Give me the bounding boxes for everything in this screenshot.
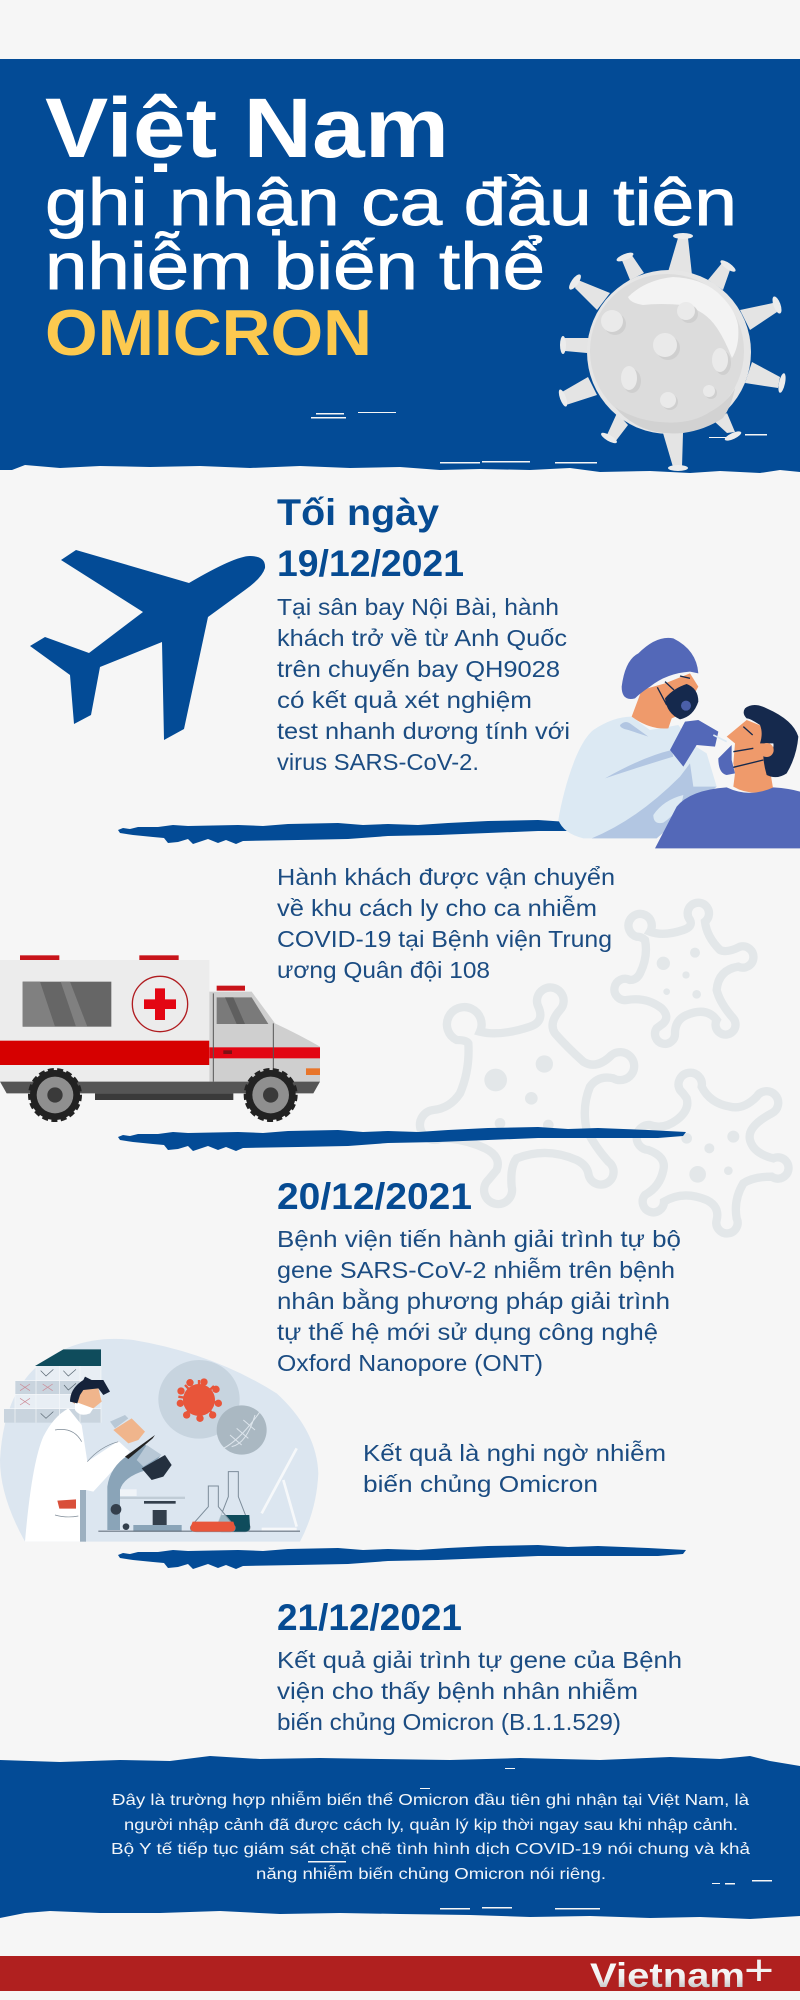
panel: conclusion — [0, 1756, 800, 1919]
text block: 19/12 heading: Tối ngày — [277, 492, 439, 533]
table line — [98, 1531, 300, 1532]
text block: transport — [277, 864, 615, 983]
text block: sequencing: Oxford Nanopore (ONT) — [277, 1350, 543, 1376]
brush stroke 2 — [118, 1127, 686, 1151]
calendar — [4, 1349, 101, 1423]
text block: airport: trên chuyến bay QH9028 — [277, 656, 560, 682]
text block: sequencing: nhân bằng phương pháp giải trình — [277, 1288, 670, 1314]
footer bar — [0, 1956, 800, 1991]
panel: header — [0, 59, 800, 473]
brush stroke 1 — [118, 820, 686, 844]
patient — [655, 705, 800, 848]
text block: result: Kết quả giải trình tự gene của Bệnh — [277, 1647, 682, 1673]
text block: 19/12 heading: 19/12/2021 — [277, 543, 464, 584]
white stand — [262, 1448, 297, 1529]
text block: sequencing: gene SARS-CoV-2 nhiễm trên bệnh — [277, 1257, 675, 1283]
text block: transport: về khu cách ly cho ca nhiễm — [277, 895, 597, 921]
text block: sequencing — [277, 1226, 681, 1376]
conclusion text: người nhập cảnh đã được cách ly, quản lý kịp thời ngay sau khi nhập cảnh. — [124, 1817, 738, 1834]
illustration: lab scientist — [0, 1339, 318, 1542]
logo: Vietnam+: Vietnam — [590, 1957, 745, 1995]
scientist — [25, 1377, 145, 1542]
conclusion text — [111, 1790, 750, 1883]
text block: sequencing: tự thế hệ mới sử dụng công nghệ — [277, 1319, 658, 1345]
virus and dna circles — [158, 1360, 267, 1455]
flasks — [190, 1472, 250, 1532]
conclusion text: năng nhiễm biến chủng Omicron nói riêng. — [256, 1864, 606, 1883]
illustration: ambulance — [0, 955, 320, 1120]
illustration: nasal swab test — [558, 638, 800, 848]
text block: 20/12 heading: 20/12/2021 — [277, 1176, 472, 1217]
text block: airport: test nhanh dương tính với — [277, 718, 570, 744]
text block: sequencing: Bệnh viện tiến hành giải trình tự bộ — [277, 1226, 681, 1252]
text block: airport — [277, 594, 570, 775]
header band — [0, 59, 800, 473]
conclusion text: Bộ Y tế tiếp tục giám sát chặt chẽ tình hình dịch COVID-19 nói chung và khả — [111, 1841, 750, 1858]
text block: airport: Tại sân bay Nội Bài, hành — [277, 594, 559, 620]
microscope — [107, 1435, 185, 1532]
band — [0, 1756, 800, 1919]
text block: airport: khách trở về từ Anh Quốc — [277, 625, 567, 651]
text block: 19/12 heading — [277, 492, 464, 584]
title: nhiễm biến thể — [45, 229, 545, 303]
title: OMICRON — [45, 296, 372, 369]
title: ghi nhận ca đầu tiên — [45, 165, 737, 239]
doctor — [558, 638, 727, 838]
text block: suspected: biến chủng Omicron — [363, 1471, 598, 1497]
text block: suspected: Kết quả là nghi ngờ nhiễm — [363, 1440, 666, 1466]
title — [45, 81, 737, 369]
conclusion text: Đây là trường hợp nhiễm biến thể Omicron đầu tiên ghi nhận tại Việt Nam, là — [112, 1790, 749, 1809]
brush stroke 3 — [118, 1545, 686, 1569]
icon: airplane — [30, 550, 265, 740]
decorative virus outlines — [420, 903, 789, 1233]
wheels — [30, 1070, 296, 1120]
text block: suspected — [363, 1440, 666, 1497]
text block: result: viện cho thấy bệnh nhân nhiễm — [277, 1678, 638, 1704]
logo: Vietnam+: + — [744, 1946, 774, 1995]
logo: Vietnam+ — [590, 1946, 774, 1995]
text block: 21/12 heading: 21/12/2021 — [277, 1597, 462, 1638]
text block: transport: COVID-19 tại Bệnh viện Trung — [277, 926, 612, 952]
text block: airport: virus SARS-CoV-2. — [277, 749, 479, 775]
text block: transport: Hành khách được vận chuyển — [277, 864, 615, 890]
text block: result: biến chủng Omicron (B.1.1.529) — [277, 1709, 621, 1735]
text block: result — [277, 1647, 682, 1735]
text block: transport: ương Quân đội 108 — [277, 957, 490, 983]
title: Việt Nam — [45, 81, 449, 175]
icon: virus — [557, 233, 787, 471]
text block: airport: có kết quả xét nghiệm — [277, 687, 532, 713]
